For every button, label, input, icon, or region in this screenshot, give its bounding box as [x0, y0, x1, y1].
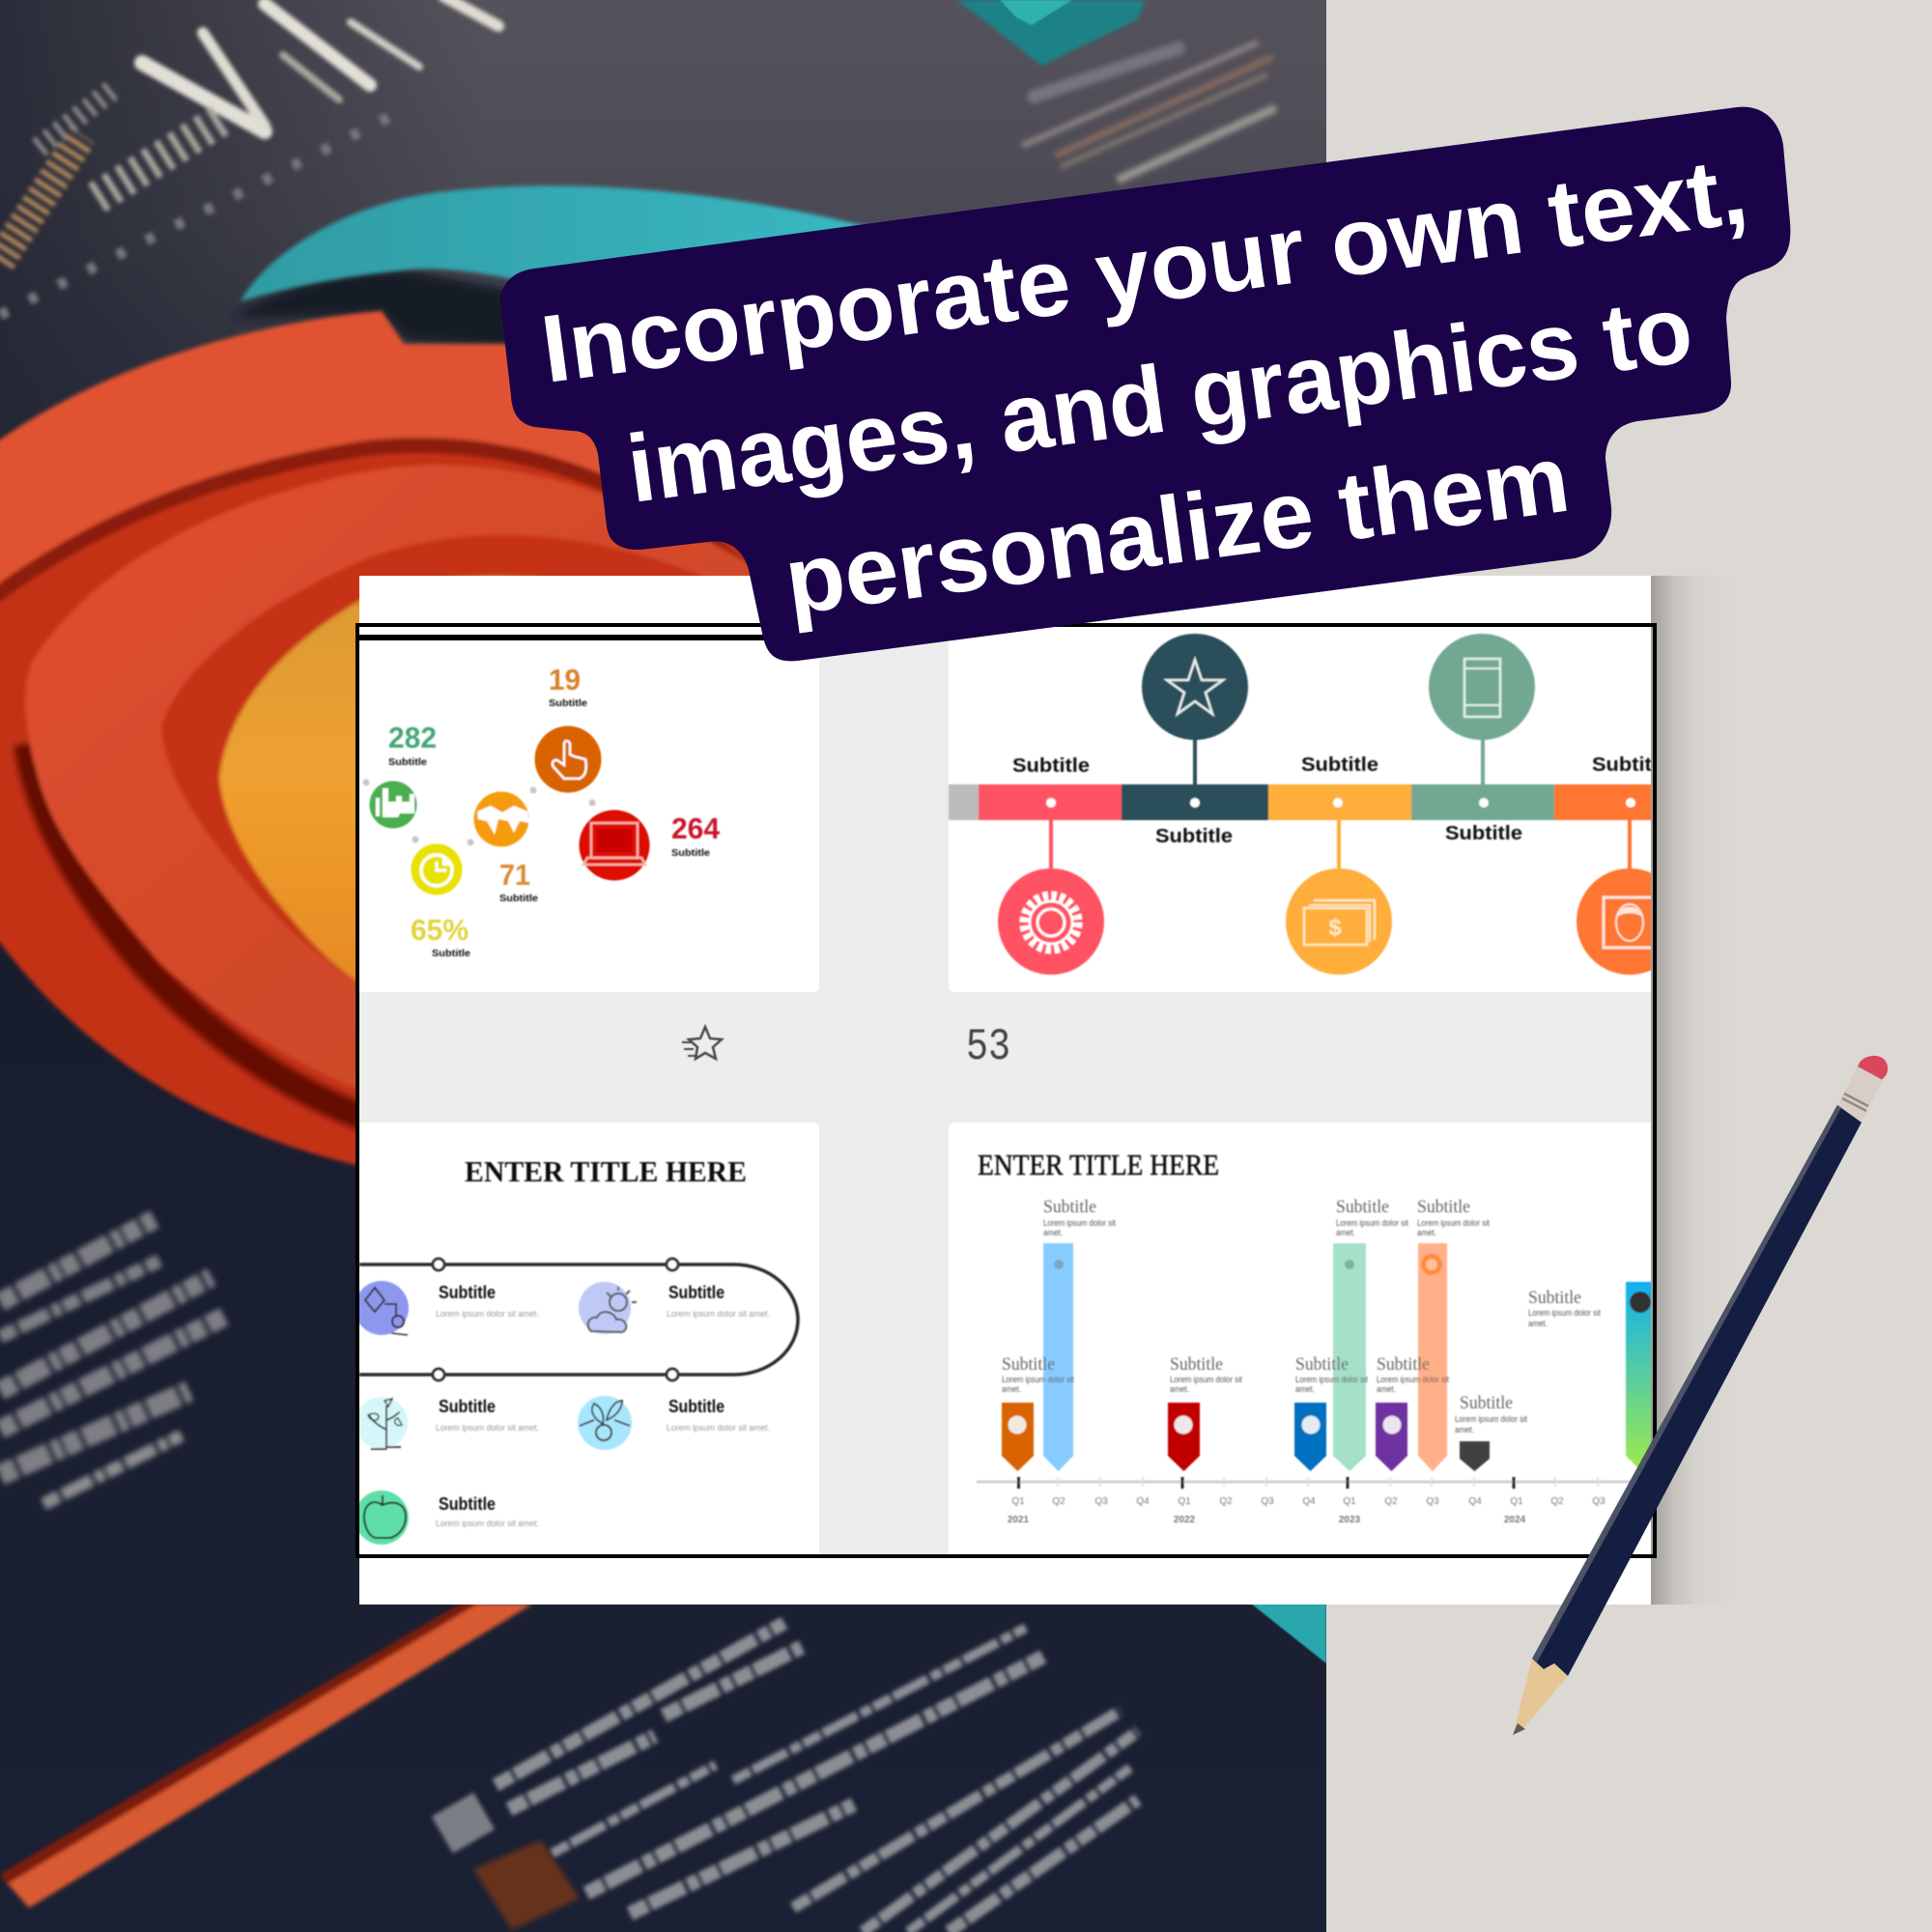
stat 282: 282 [388, 721, 437, 754]
subtitles: Subtitle [439, 1494, 496, 1514]
stat 282: Subtitle [388, 757, 427, 768]
loop track [359, 1264, 798, 1375]
quarter and year labels: Q1 [1011, 1496, 1025, 1507]
quarter and year labels: 2021 [1008, 1515, 1030, 1525]
quarter and year labels: Q4 [1302, 1496, 1316, 1507]
quarter and year labels: Q1 [1343, 1496, 1356, 1507]
card 4 pennant timeline [949, 1122, 1683, 1567]
stat 65%: 65% [411, 913, 469, 947]
banner shape [500, 107, 1790, 661]
headline line 2: images, and graphics to [621, 274, 1698, 523]
stat 19: 19 [549, 663, 581, 696]
ferrule ridges [1842, 1094, 1868, 1111]
arrow markers [363, 779, 595, 846]
grey canvas [359, 627, 1651, 1554]
icon: sun and cloud [579, 1282, 637, 1334]
barrel [1532, 1105, 1861, 1676]
card 4 background [949, 1122, 1683, 1567]
card 3 background [348, 1122, 819, 1567]
outer orange band [0, 309, 601, 585]
lorem labels: amet. [1336, 1228, 1355, 1237]
headline text [535, 136, 1753, 635]
stat 71 [499, 858, 538, 904]
sheet side shadow [1651, 576, 1733, 1605]
subtitle labels: Subtitle [1043, 1197, 1096, 1217]
subtitles [439, 1283, 724, 1514]
top double rule [355, 635, 993, 640]
stat 264: 264 [671, 811, 721, 845]
subtitle labels: Subtitle [1377, 1354, 1430, 1375]
card 4 title: ENTER TITLE HERE [978, 1148, 1219, 1181]
quarter and year labels: Q1 [1510, 1496, 1523, 1507]
stat 71: Subtitle [499, 894, 538, 904]
subtitles: Subtitle [439, 1397, 496, 1416]
inner orange band [24, 464, 750, 1090]
white sheet [359, 576, 1651, 1605]
ferrule [1837, 1066, 1883, 1122]
quarter and year labels: Q3 [1261, 1496, 1274, 1507]
sheet screenshot content [348, 618, 1683, 1567]
top right teal block [956, 0, 1145, 66]
wood tip [1513, 1659, 1568, 1735]
node: gear [998, 820, 1104, 975]
photo base [0, 0, 1326, 1932]
page star icon [682, 1027, 722, 1059]
node: phone [1429, 634, 1535, 784]
subtitle labels: Subtitle [1417, 1197, 1470, 1217]
lorem labels: amet. [1295, 1384, 1315, 1394]
quarter and year labels: Q2 [1384, 1496, 1398, 1507]
quarter and year labels [1008, 1496, 1605, 1525]
card 2 timeline [949, 618, 1683, 992]
headline line 3: personalize them [779, 424, 1576, 635]
icon: watering can [355, 1281, 409, 1335]
subtitles: Subtitle [1301, 754, 1378, 776]
lorem labels: amet. [1417, 1228, 1436, 1237]
lorem labels: amet. [1002, 1384, 1021, 1394]
left blurred text block [0, 1219, 224, 1504]
pennant bars [1002, 1243, 1657, 1471]
lorem lines: Lorem ipsum dolor sit amet. [436, 1423, 539, 1433]
loop nodes [433, 1259, 678, 1380]
subtitle labels: Subtitle [1002, 1354, 1055, 1375]
photo top left shade [0, 0, 392, 439]
quarter and year labels: 2023 [1339, 1515, 1361, 1525]
lorem labels [1002, 1218, 1601, 1435]
quarter and year labels: 2024 [1504, 1515, 1526, 1525]
lorem labels: Lorem ipsum dolor sit [1528, 1308, 1601, 1318]
lorem labels: amet. [1455, 1425, 1474, 1435]
icon: hand pointer [535, 726, 601, 792]
yellow centre [216, 573, 545, 983]
stat 65%: Subtitle [432, 949, 470, 959]
eraser [1856, 1056, 1888, 1080]
node: star [1142, 634, 1248, 784]
bottom right teal corner [1251, 1604, 1326, 1663]
icon: sprout [355, 1397, 408, 1449]
black frame [357, 625, 1655, 1556]
lorem labels: Lorem ipsum dolor sit [1170, 1375, 1242, 1384]
lorem labels: Lorem ipsum dolor sit [1295, 1375, 1368, 1384]
quarter and year labels: Q4 [1468, 1496, 1482, 1507]
bar face [8, 1604, 533, 1908]
QR block [432, 1793, 495, 1854]
icon: apple [355, 1491, 409, 1545]
card 2 background [949, 618, 1683, 992]
graphite point [1513, 1723, 1525, 1735]
bottom blurred text blocks [496, 1623, 1138, 1932]
subtitles: Subtitle [668, 1283, 724, 1302]
subtitles: Subtitle [1012, 755, 1090, 777]
subtitle labels: Subtitle [1336, 1197, 1389, 1217]
lorem lines: Lorem ipsum dolor sit amet. [667, 1423, 770, 1433]
stats content [363, 663, 721, 959]
lorem lines: Lorem ipsum dolor sit amet. [436, 1519, 539, 1528]
icon: seedling [578, 1396, 632, 1450]
top right teal highlight [1000, 0, 1072, 25]
subtitle labels: Subtitle [1528, 1288, 1581, 1308]
subtitle labels: Subtitle [1460, 1393, 1513, 1413]
subtitles: Subtitle [1155, 826, 1233, 847]
subtitles: Subtitle [439, 1283, 496, 1302]
quarter and year labels: Q1 [1178, 1496, 1191, 1507]
subtitles: Subtitle [668, 1397, 724, 1416]
swirl base [0, 450, 747, 1169]
teal arc [240, 184, 867, 303]
card 1 radial stats [348, 618, 819, 992]
lorem labels: Lorem ipsum dolor sit [1377, 1375, 1449, 1384]
quarter and year labels: Q3 [1592, 1496, 1605, 1507]
lorem lines [436, 1309, 770, 1528]
quarter and year labels: Q4 [1136, 1496, 1150, 1507]
lorem labels: Lorem ipsum dolor sit [1417, 1218, 1490, 1228]
subtitles [1012, 754, 1669, 847]
subtitle labels: Subtitle [1170, 1354, 1223, 1375]
icon: world map [473, 792, 529, 846]
pennant badges [1009, 1254, 1651, 1434]
quarter and year labels: 2022 [1174, 1515, 1196, 1525]
stat 19: Subtitle [549, 698, 587, 709]
icon: factory chart [369, 781, 417, 829]
headline line 1: Incorporate your own text, [535, 136, 1753, 403]
background photo: dark brochure with orange swirl [0, 0, 1326, 1932]
bottom orange bar [0, 1602, 533, 1908]
quarter and year labels: Q3 [1426, 1496, 1439, 1507]
dark gap under teal arc [234, 269, 506, 345]
timeline dots [1046, 798, 1635, 808]
lorem labels: amet. [1528, 1319, 1548, 1328]
lorem labels: Lorem ipsum dolor sit [1043, 1218, 1116, 1228]
orange swirl [0, 307, 750, 1169]
subtitle labels [1002, 1197, 1581, 1413]
node: portrait [1577, 820, 1683, 975]
dark lower shadow [27, 744, 377, 1122]
top left white title marks [0, 0, 498, 315]
red brown block [473, 1840, 580, 1930]
white strip between rules [359, 627, 987, 635]
card 1 background [348, 618, 819, 992]
pencil [1513, 1056, 1888, 1735]
dark upper arc [0, 445, 802, 618]
quarter and year labels: Q2 [1550, 1496, 1564, 1507]
lorem labels: Lorem ipsum dolor sit [1455, 1414, 1527, 1424]
stat 71: 71 [499, 858, 530, 892]
stat 264: Subtitle [671, 848, 710, 859]
bar dark edge [0, 1602, 483, 1886]
stat 282 [388, 721, 437, 768]
icon: pie chart [412, 844, 462, 895]
icon: laptop [580, 810, 649, 881]
lorem labels: amet. [1043, 1228, 1063, 1237]
time axis [977, 1477, 1653, 1489]
lorem labels: Lorem ipsum dolor sit [1002, 1375, 1074, 1384]
subtitle labels: Subtitle [1295, 1354, 1349, 1375]
stat 19 [549, 663, 587, 709]
lorem labels: amet. [1170, 1384, 1189, 1394]
node: money: $ [1328, 915, 1342, 941]
lorem lines: Lorem ipsum dolor sit amet. [667, 1309, 770, 1319]
top right blurred logo marks [1024, 43, 1275, 179]
timeline bar segments [949, 784, 1661, 820]
node: money [1286, 820, 1392, 975]
page number: 53 [966, 1022, 1010, 1072]
subtitles: Subtitle [1592, 754, 1669, 776]
lorem lines: Lorem ipsum dolor sit amet. [436, 1309, 539, 1319]
subtitles: Subtitle [1445, 823, 1522, 844]
lorem labels: amet. [1377, 1384, 1396, 1394]
quarter and year labels: Q2 [1219, 1496, 1233, 1507]
barrel highlight [1532, 1105, 1841, 1662]
quarter and year labels: Q2 [1052, 1496, 1065, 1507]
card 3 loop [348, 1122, 819, 1567]
inner red crescent [160, 534, 703, 974]
quarter and year labels: Q3 [1094, 1496, 1108, 1507]
headline banner [500, 107, 1790, 661]
lorem labels: Lorem ipsum dolor sit [1336, 1218, 1408, 1228]
card 3 title: ENTER TITLE HERE [465, 1154, 747, 1188]
